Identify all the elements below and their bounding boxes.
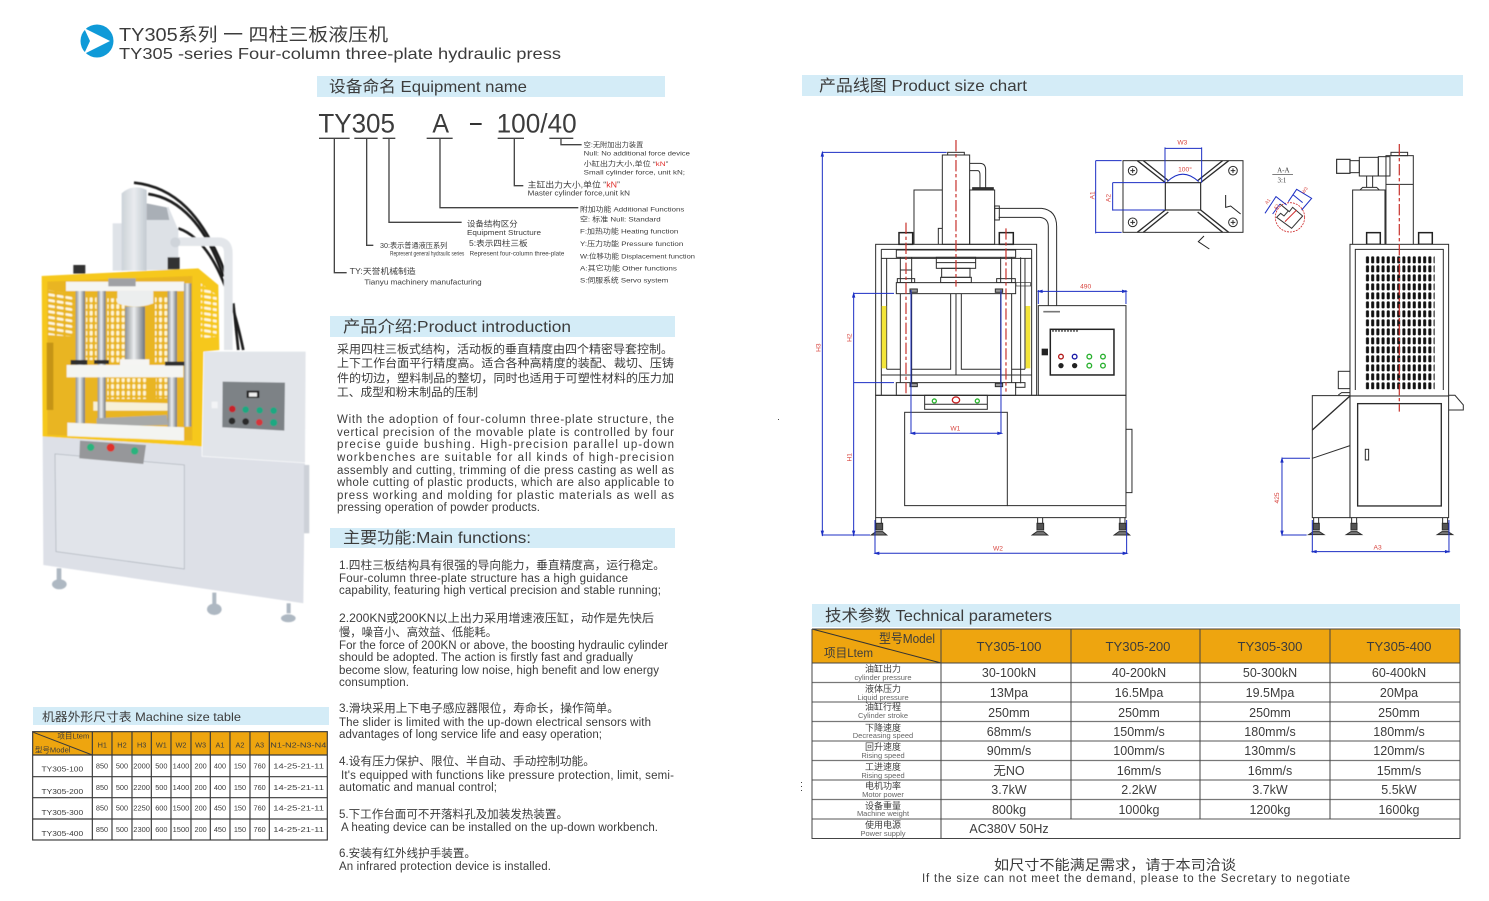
row TY305-300 [41,804,324,817]
plates [66,282,184,291]
text block: introduction: With the adoption of four-column three-plate structure, the [337,414,674,426]
table values: 800kg [992,803,1026,817]
labels: structure and series: 5:表示四柱三板 [469,238,528,248]
table values: 19.5Mpa [1246,686,1294,700]
table values: 250mm [1249,706,1291,720]
row TY305-200: 14-25-21-11 [273,783,324,792]
side view center line [1398,144,1401,412]
row TY305-300: 14-25-21-11 [273,804,324,813]
side view dimensions [1280,457,1451,553]
row TY305-300: 1500 [173,804,189,813]
section detail A-A: W3 [1301,186,1309,195]
labels: additional functions [580,204,695,285]
table: machine size: 项目Ltem [57,731,89,740]
table values: 20Mpa [1380,686,1418,700]
text block: main functions [339,558,674,873]
table values: 1000kg [1118,803,1160,817]
table: machine size: N1-N2-N3-N4 [270,740,326,749]
drawing: top plan view [1089,139,1463,553]
row TY305-100: 400 [214,762,226,771]
model code [318,109,577,139]
table: machine size: A2 [235,740,244,749]
row TY305-400: 450 [214,825,226,834]
table: machine size: H3 [137,740,146,749]
footer note: If the size can not meet the demand, please to the Secretary to negotiate [922,873,1350,885]
side view labels [1274,492,1382,552]
drawing: front view [816,140,1132,555]
row TY305-100: 200 [195,762,207,771]
text block: introduction: precise guide bushing. High-precision parallel up-down [337,439,674,451]
table: machine size [33,731,327,840]
row TY305-200 [41,783,324,796]
labels: additional functions: 空: 标准 Null: Standard [580,215,661,224]
door [55,454,184,569]
table values: 130mm/s [1244,744,1296,758]
labels: cylinder force: 主缸出力大小,单位 “ kN” [528,180,620,190]
footer note: 如尺寸不能满足需求，请于本司洽谈 [994,857,1236,873]
labels: additional functions: F:加热功能 Heating function [580,227,679,236]
text block: main functions: 6.安装有红外线护手装置。 [339,846,476,860]
table header: TY305-300 [1238,640,1303,654]
hoses [134,183,243,350]
text block: main functions: 2.200KN或200KN以上出力采用增速液压缸，动作是先快后 [339,611,654,625]
row TY305-200: 500 [116,783,128,792]
row TY305-300: 200 [195,804,207,813]
row TY305-200: 150 [234,783,246,792]
row TY305-100: 760 [254,762,266,771]
table values: 180mm/s [1244,725,1296,739]
text block: main functions: 3.滑块采用上下电子感应器限位，寿命长，操作简单。 [339,701,619,715]
control box and panel [1038,306,1126,395]
row TY305-400: 500 [116,825,128,834]
section bar: equipment name: 设备命名 Equipment name [329,78,527,96]
labels: structure and series: Represent four-column three-plate [470,250,565,257]
control box [202,352,306,463]
model code: 100/40 [497,109,577,139]
section detail A-A: A2 [1273,203,1280,211]
row TY305-400: 2300 [133,825,150,834]
table values: 15mm/s [1377,764,1421,778]
text block: main functions: should be adopted. The action is firstly fast and gradually [339,652,633,664]
labels: structure and series: 30:表示普通液压系列 [380,241,447,250]
text block: introduction: pressing operation of powder products. [337,502,540,514]
table values: 16mm/s [1117,764,1161,778]
row TY305-300: 760 [254,804,266,813]
labels: structure and series: Represent general hydraulic series [390,251,465,258]
row TY305-200: 200 [195,783,207,792]
row TY305-300: 2250 [133,804,150,813]
table header: TY305-100 [976,640,1042,654]
labels: structure and series: 设备结构区分 [467,218,518,228]
base cabinet [871,395,1132,535]
text block: main functions: capability, featuring high vertical precision and stable running; [339,585,661,597]
row TY305-100: 500 [155,762,167,771]
row labels: 液体压力 [865,683,901,694]
row labels: 工进速度 [865,761,901,772]
row TY305-100: 1400 [173,762,189,771]
row TY305-200: 2200 [133,783,150,792]
dimension labels: H1 [847,453,854,462]
center lines [906,140,1006,393]
labels: cylinder force: Null: No additional force device [584,151,690,158]
table values: 150mm/s [1113,725,1165,739]
labels: additional functions: Y:压力功能 Pressure function [580,239,684,248]
labels: cylinder force [528,140,690,197]
row labels: Rising speed [861,751,905,760]
dimension lines [821,151,1129,555]
section detail A-A [1264,166,1312,232]
table: machine size: 型号Model [35,745,71,754]
section bar: product introduction: 产品介绍:Product introduction [343,318,571,336]
row labels: 油缸行程 [865,701,901,712]
text block: main functions: A heating device can be installed on the up-down workbench. [341,822,658,834]
row TY305-200: 1400 [173,783,189,792]
text block: main functions: 慢，噪音小、高效益、低能耗。 [339,625,497,639]
table values: AC380V 50Hz [969,822,1049,836]
text block: introduction: 工、成型和粉末制品的压制 [337,385,478,399]
section bar: product introduction [330,316,675,337]
row TY305-100: TY305-100 [41,765,83,774]
text block: main functions: The slider is limited with the up-down electrical sensors with [339,717,651,729]
text block: main functions: consumption. [339,677,409,689]
section detail A-A: A1 [1264,197,1272,205]
plan labels: W3 [1177,139,1188,146]
text block: main functions: 4.设有压力保护、限位、半自动、手动控制功能。 [339,754,595,768]
text block: main functions: automatic and manual control; [339,782,497,794]
row TY305-300: 450 [214,804,226,813]
section bar: equipment name [317,76,665,97]
row labels: Cylinder stroke [858,711,908,720]
stray marks [778,419,802,791]
text block: main functions: It's equipped with functions like pressure protection, limit, semi- [341,770,674,782]
table values: 2.2kW [1121,783,1157,797]
row labels: 使用电源 [865,819,901,830]
naming diagram [318,109,695,286]
row labels: 下降速度 [865,722,901,733]
table values: 100mm/s [1113,744,1165,758]
row TY305-400: 760 [254,825,266,834]
safety light curtain [47,343,53,410]
text block: main functions: 5.下工作台面可不开落料孔及加装发热装置。 [339,807,568,821]
labels: additional functions: W:位移功能 Displacement function [580,251,695,260]
dimension labels: 490 [1080,283,1091,290]
section detail A-A: A-A [1277,166,1290,174]
side view labels: A3 [1374,545,1382,552]
text block: main functions: advantages of long service life and easy operation; [339,729,602,741]
row TY305-100: 500 [116,762,128,771]
table: technical parameters [812,629,1460,838]
row TY305-400: 200 [195,825,207,834]
row labels: 油缸出力 [865,663,901,674]
row TY305-200: 850 [96,783,108,792]
row labels: 回升速度 [865,741,901,752]
labels: cylinder force: Master cylinder force,unit kN [528,188,630,197]
text block: main functions: 1.四柱三板结构具有很强的导向能力，垂直精度高，运行稳定。 [339,558,665,572]
labels: additional functions: A:其它功能 Other functions [580,263,678,272]
table header [812,629,1460,663]
row TY305-100 [41,762,324,774]
dimension labels: H3 [816,343,823,352]
labels: additional functions: S:伺服系统 Servo system [580,276,669,285]
row TY305-200: TY305-200 [41,787,83,796]
row labels: Rising speed [861,771,905,780]
table values: 30-100kN [982,666,1036,680]
row TY305-400: 1500 [173,825,189,834]
row TY305-200: 400 [214,783,226,792]
text block: main functions: An infrared protection device is installed. [339,861,551,873]
text block: introduction: 上下工作台面平行精度高。适合各种高精度的装配、裁切、压铸 [337,356,675,370]
text block: introduction: assembly and cutting, trimming of die press casting as well as [337,465,674,477]
section bar: machine size table [33,707,329,725]
section bar: technical parameters: 技术参数 Technical parameters [825,607,1052,625]
table values [969,666,1426,836]
labels: cylinder force: Small cylinder force, unit kN; [584,169,685,176]
pipe [178,242,228,350]
nuts on top [73,265,85,274]
row TY305-100: 2000 [133,762,150,771]
side view labels: 425 [1274,492,1281,504]
table values: 120mm/s [1373,744,1425,758]
table values: 60-400kN [1372,666,1426,680]
plan labels [1089,139,1192,202]
drawing: side view [1274,144,1463,553]
text block: introduction [336,342,675,514]
table: machine size: A3 [255,740,264,749]
table header: 型号Model [879,631,935,646]
labels: structure and series [350,218,565,286]
row TY305-400 [41,825,324,838]
text block: main functions: For the force of 200KN or above, the boosting hydraulic cylinder [339,640,668,652]
row TY305-300: 150 [234,804,246,813]
row labels: Decreasing speed [853,731,913,740]
row TY305-100: 850 [96,762,108,771]
table: machine size: H2 [117,740,127,749]
columns [98,290,106,423]
dimension labels: H2 [847,333,854,342]
table: machine size: W1 [156,740,167,749]
table: machine size: H1 [98,740,107,749]
plan labels: A2 [1106,194,1113,202]
text block: introduction: vertical precision of the movable plate is controlled by four [337,427,674,439]
title English: TY305 -series Four-column three-plate hydraulic press [119,46,561,63]
table: machine size: A1 [215,740,224,749]
dimension labels: W1 [950,426,961,433]
section arrows [1198,195,1241,249]
leader lines [319,138,582,273]
table values: 250mm [1378,706,1420,720]
row TY305-400: 600 [155,825,167,834]
table values: 无NO [993,764,1025,778]
yellow frame [42,268,219,447]
table values: 40-200kN [1112,666,1166,680]
table values: 16mm/s [1248,764,1292,778]
safety strips [882,306,886,368]
row TY305-200: 500 [155,783,167,792]
row labels: Liquid pressure [857,693,909,702]
row TY305-200: 760 [254,783,266,792]
table values: 1200kg [1249,803,1291,817]
text block: introduction: whole cutting of plastic products, which are also applicable to [336,477,674,489]
feet [52,568,296,622]
table values: 13Mpa [990,686,1028,700]
row labels: Machine weight [857,809,910,818]
labels: cylinder force: 空:无附加出力装置 [584,140,644,149]
table: machine size: W3 [195,740,206,749]
row TY305-400: 14-25-21-11 [273,825,324,834]
dimension labels: W2 [993,545,1003,552]
row TY305-100: 14-25-21-11 [273,762,324,771]
table values: 3.7kW [991,783,1027,797]
model code: A [432,109,449,139]
table values: 68mm/s [987,725,1031,739]
model code: TY305 [318,109,395,139]
row TY305-400: 850 [96,825,108,834]
table header: 项目Ltem [824,646,873,660]
table values: 3.7kW [1252,783,1288,797]
row TY305-300: TY305-300 [41,808,83,817]
title Chinese: TY305系列 一 四柱三板液压机 [119,25,388,45]
text block: introduction: 采用四柱三板式结构，活动板的垂直精度由四个精密导套控制。 [337,342,673,356]
labels: structure and series: Equipment Structure [467,230,541,237]
table values: 90mm/s [987,744,1031,758]
row TY305-100: 150 [234,762,246,771]
header: logo and title [80,24,561,63]
row labels: 电机功率 [865,780,901,791]
table values: 50-300kN [1243,666,1297,680]
table values: 16.5Mpa [1115,686,1163,700]
row TY305-400: 150 [234,825,246,834]
dimension labels [816,283,1091,552]
cabinet base [43,437,305,603]
table values: 5.5kW [1381,783,1417,797]
row labels: Power supply [860,829,906,838]
row TY305-300: 500 [116,804,128,813]
labels: structure and series: TY:天誉机械制造 [350,266,416,276]
row TY305-300: 850 [96,804,108,813]
section bar: main functions [330,528,675,548]
row labels: 设备重量 [865,800,901,811]
table values: 1600kg [1378,803,1420,817]
section bar: machine size table: 机器外形尺寸表 Machine size table [42,710,241,724]
table values: 180mm/s [1373,725,1425,739]
labels: cylinder force: 小缸出力大小,单位 “ kN” [584,159,668,168]
text block: main functions: become slow, featuring low noise, high benefit and low energy [339,665,659,677]
section bar: technical parameters [812,604,1460,627]
table grid [812,629,1460,838]
row TY305-400: TY305-400 [41,829,83,838]
button plate [79,441,146,464]
text block: introduction: press working and molding for plastic materials as well as [337,490,674,502]
table values: 250mm [1118,706,1160,720]
section detail A-A: 3:1 [1278,176,1287,184]
table values: 250mm [988,706,1030,720]
plan labels: 100° [1178,166,1192,174]
labels: additional functions: 附加功能 Additional Functions [580,204,685,213]
text block: introduction: 件的切边，塑料制品的整切，同时也适用于可塑性材料的压力加 [337,371,674,385]
section bar: main functions: 主要功能:Main functions: [343,529,531,547]
plan dimensions [1096,147,1202,233]
table header: TY305-400 [1366,640,1432,654]
labels: structure and series: Tianyu machinery manufacturing [364,279,482,286]
text block: introduction: workbenches are suitable for all kinds of high-precision [336,452,674,464]
footer note [922,857,1350,885]
text block: main functions: Four-column three-plate structure has a high guidance [339,573,628,585]
table header: TY305-200 [1106,640,1171,654]
row labels: cylinder pressure [854,673,912,682]
row labels [853,663,913,838]
row TY305-300: 600 [155,804,167,813]
table: machine size: W2 [175,740,186,749]
plan labels: A1 [1089,191,1096,199]
icon: blue play logo [80,24,114,58]
photo: hydraulic press machine [42,183,309,622]
section bar: product size chart [802,75,1463,96]
section bar: product size chart: 产品线图 Product size chart [819,77,1028,95]
row labels: Motor power [862,790,904,799]
